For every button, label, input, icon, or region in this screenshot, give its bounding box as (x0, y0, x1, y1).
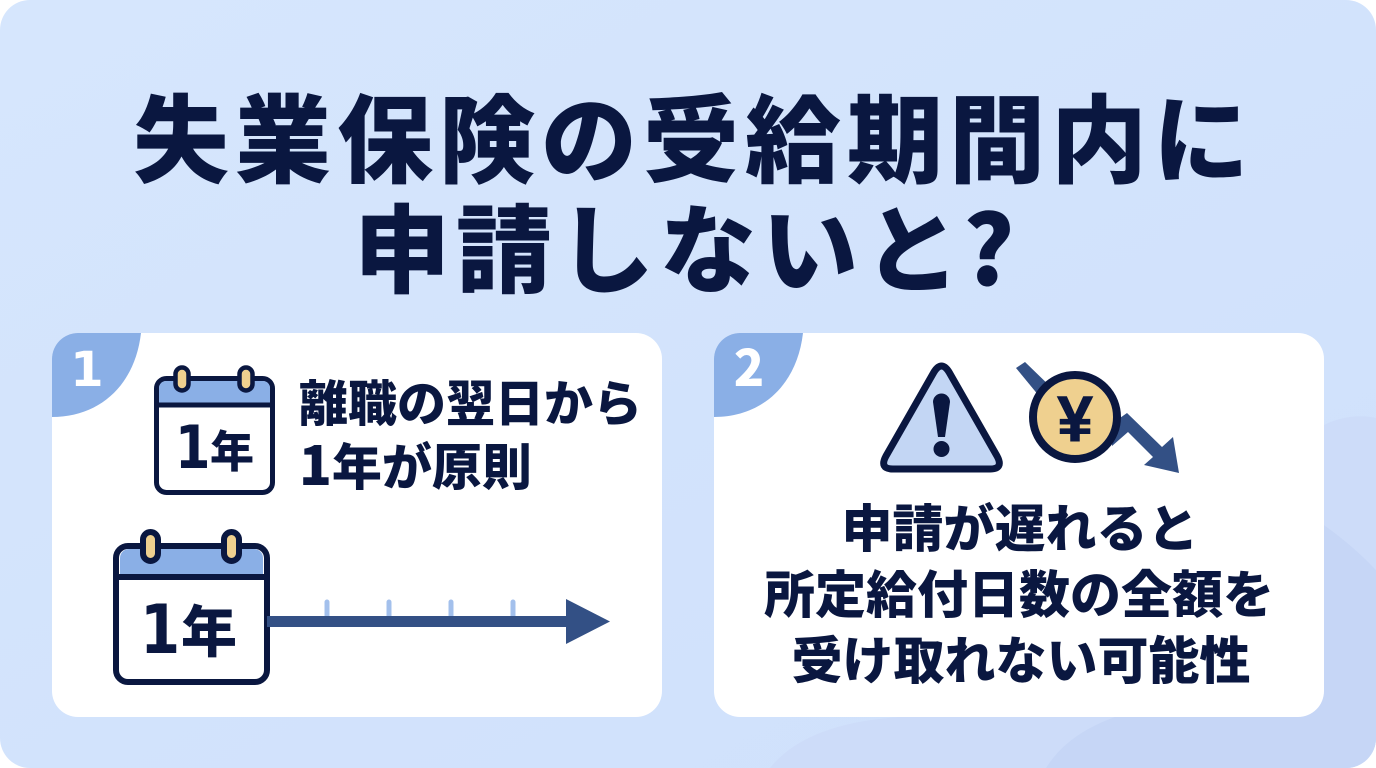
title (133, 64, 1255, 313)
text: 離職の翌日から 1年が原則: 離職の翌日から (299, 365, 642, 436)
icon: small calendar 1年: 年 (210, 416, 254, 480)
text: warning message: 申請が遅れると (841, 488, 1199, 562)
icon: small calendar 1年 (156, 368, 273, 492)
icon: large calendar 1年: 1 (140, 589, 180, 669)
title: 申請しないと? (354, 174, 1020, 313)
icon: falling yen arrow: ¥ (1057, 383, 1093, 455)
icon: falling yen arrow (1016, 362, 1179, 473)
panel 2: late application warning (714, 329, 1324, 717)
text: warning message (764, 488, 1274, 694)
text: 離職の翌日から 1年が原則: 1年が原則 (299, 422, 532, 501)
text: warning message: 受け取れない可能性 (791, 620, 1251, 694)
title: 失業保険の受給期間内に (133, 64, 1255, 203)
panel 1: 1 year rule (52, 333, 662, 717)
icon: large calendar 1年 (114, 532, 269, 682)
icon: warning triangle (884, 366, 999, 469)
badge 2 (714, 329, 803, 417)
text: warning message: 所定給付日数の全額を (764, 554, 1274, 628)
badge 1: 1 (70, 342, 104, 398)
icon: large calendar 1年: 年 (181, 588, 237, 669)
icon: small calendar 1年: 1 (175, 413, 210, 483)
text: 離職の翌日から 1年が原則 (299, 365, 642, 501)
badge 1 (52, 333, 141, 417)
arrow: timeline (267, 599, 610, 644)
badge 2: 2 (734, 329, 764, 401)
